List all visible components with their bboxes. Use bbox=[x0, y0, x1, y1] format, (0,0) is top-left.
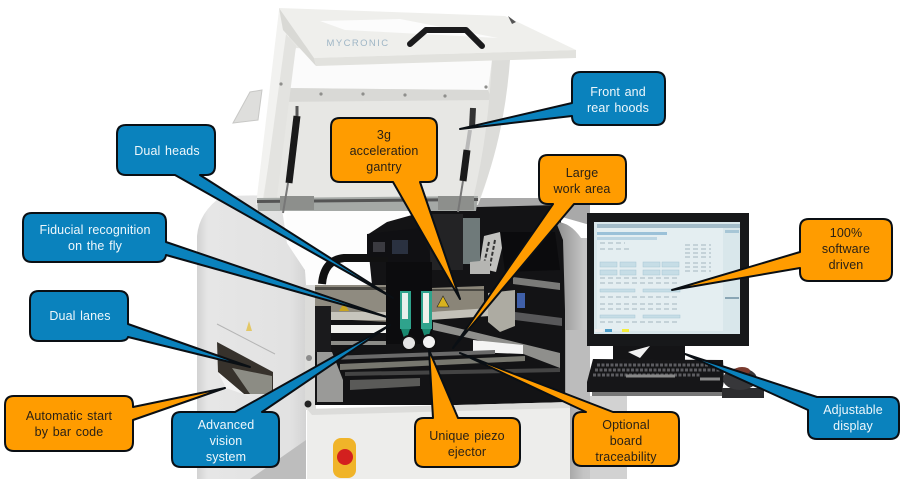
hood glass bbox=[285, 48, 492, 90]
callout: 100% software driven: driven bbox=[829, 258, 863, 272]
lower-left slot edge bbox=[218, 372, 260, 400]
callout: adjustable display: display bbox=[833, 419, 874, 433]
callout: fiducial recognition on the fly: on the fly bbox=[68, 239, 123, 253]
callout: unique piezo ejector bbox=[415, 350, 520, 467]
gantry beam bbox=[315, 285, 390, 322]
cable chain bbox=[322, 258, 388, 284]
hood top lid bbox=[279, 8, 576, 58]
callout: 100% software driven: software bbox=[822, 242, 870, 256]
emergency stop button bbox=[333, 438, 356, 478]
left grey block bbox=[317, 352, 343, 402]
lid latch bbox=[508, 16, 516, 24]
callout: large work area bbox=[453, 155, 626, 348]
callout: dual heads: Dual heads bbox=[134, 144, 200, 158]
strip between body and interior bbox=[305, 285, 316, 410]
monitor arm bbox=[613, 346, 685, 360]
callout: 3g acceleration gantry: acceleration bbox=[350, 144, 418, 158]
syringe left bbox=[400, 291, 411, 329]
callout: 3g acceleration gantry: 3g bbox=[377, 128, 391, 142]
upper body roof bbox=[470, 198, 590, 225]
interior dark bbox=[315, 205, 566, 405]
callout: 3g acceleration gantry: gantry bbox=[366, 160, 402, 174]
white gap behind gantry bbox=[286, 205, 440, 285]
callout: 3g acceleration gantry bbox=[331, 118, 460, 299]
dispensing head bbox=[367, 228, 432, 300]
callout: 100% software driven bbox=[672, 219, 892, 290]
callout: advanced vision system: Advanced bbox=[198, 418, 254, 432]
callout: adjustable display: Adjustable bbox=[823, 403, 883, 417]
gas strut right bbox=[472, 108, 473, 128]
hood handle bbox=[410, 30, 482, 46]
ejector knobs bbox=[402, 336, 416, 350]
callout: fiducial recognition on the fly: Fiducial recognition bbox=[39, 223, 151, 237]
rear hood bbox=[233, 90, 262, 123]
callout: advanced vision system: vision bbox=[210, 434, 242, 448]
machine illustration bbox=[197, 8, 764, 479]
callout: unique piezo ejector: Unique piezo bbox=[429, 429, 505, 443]
warning triangle bbox=[437, 296, 449, 307]
callout: dual heads bbox=[117, 125, 393, 298]
conveyor rails bbox=[433, 322, 560, 368]
right carriage bbox=[488, 290, 515, 332]
callout: advanced vision system bbox=[172, 325, 390, 467]
callout: automatic start by bar code: Automatic start bbox=[26, 409, 112, 423]
callout: fiducial recognition on the fly bbox=[23, 213, 387, 317]
callout: unique piezo ejector: ejector bbox=[448, 445, 486, 459]
callout: large work area: Large bbox=[566, 166, 598, 180]
callout: 100% software driven: 100% bbox=[830, 226, 862, 240]
gas strut left bbox=[296, 106, 298, 116]
hood hinge rail bbox=[257, 196, 478, 211]
lane slot bbox=[217, 342, 273, 394]
hood back panel bbox=[257, 30, 510, 205]
upper interior panel bbox=[463, 218, 480, 264]
body bolts bbox=[306, 355, 312, 361]
callout: dual lanes: Dual lanes bbox=[49, 309, 111, 323]
callout: automatic start by bar code: by bar code bbox=[35, 425, 103, 439]
white cable bracket bbox=[479, 232, 504, 272]
syringe right bbox=[421, 291, 432, 329]
callout: large work area: work area bbox=[553, 182, 610, 196]
left side body bbox=[197, 195, 306, 479]
callout: optional board traceability: board bbox=[610, 434, 642, 448]
callout: adjustable display bbox=[685, 354, 899, 439]
monitor bbox=[587, 213, 749, 346]
keyboard bbox=[587, 359, 764, 398]
callout: front and rear hoods: rear hoods bbox=[587, 101, 649, 115]
callout: optional board traceability: traceability bbox=[595, 450, 657, 464]
lower front panel bbox=[307, 402, 570, 479]
right pillar bbox=[556, 222, 625, 479]
callout: front and rear hoods bbox=[460, 72, 665, 129]
callout: optional board traceability: Optional bbox=[602, 418, 650, 432]
callout: advanced vision system: system bbox=[206, 450, 246, 464]
brand mark: MYCRONIC bbox=[327, 38, 389, 49]
callout: front and rear hoods: Front and bbox=[590, 85, 646, 99]
callout: automatic start by bar code bbox=[5, 388, 225, 451]
callout: optional board traceability bbox=[460, 353, 679, 466]
callout: dual lanes bbox=[30, 291, 250, 367]
right arm bbox=[472, 60, 510, 203]
left dark block bbox=[315, 306, 331, 352]
hood bolts bbox=[279, 82, 488, 98]
left arm bbox=[256, 10, 290, 205]
